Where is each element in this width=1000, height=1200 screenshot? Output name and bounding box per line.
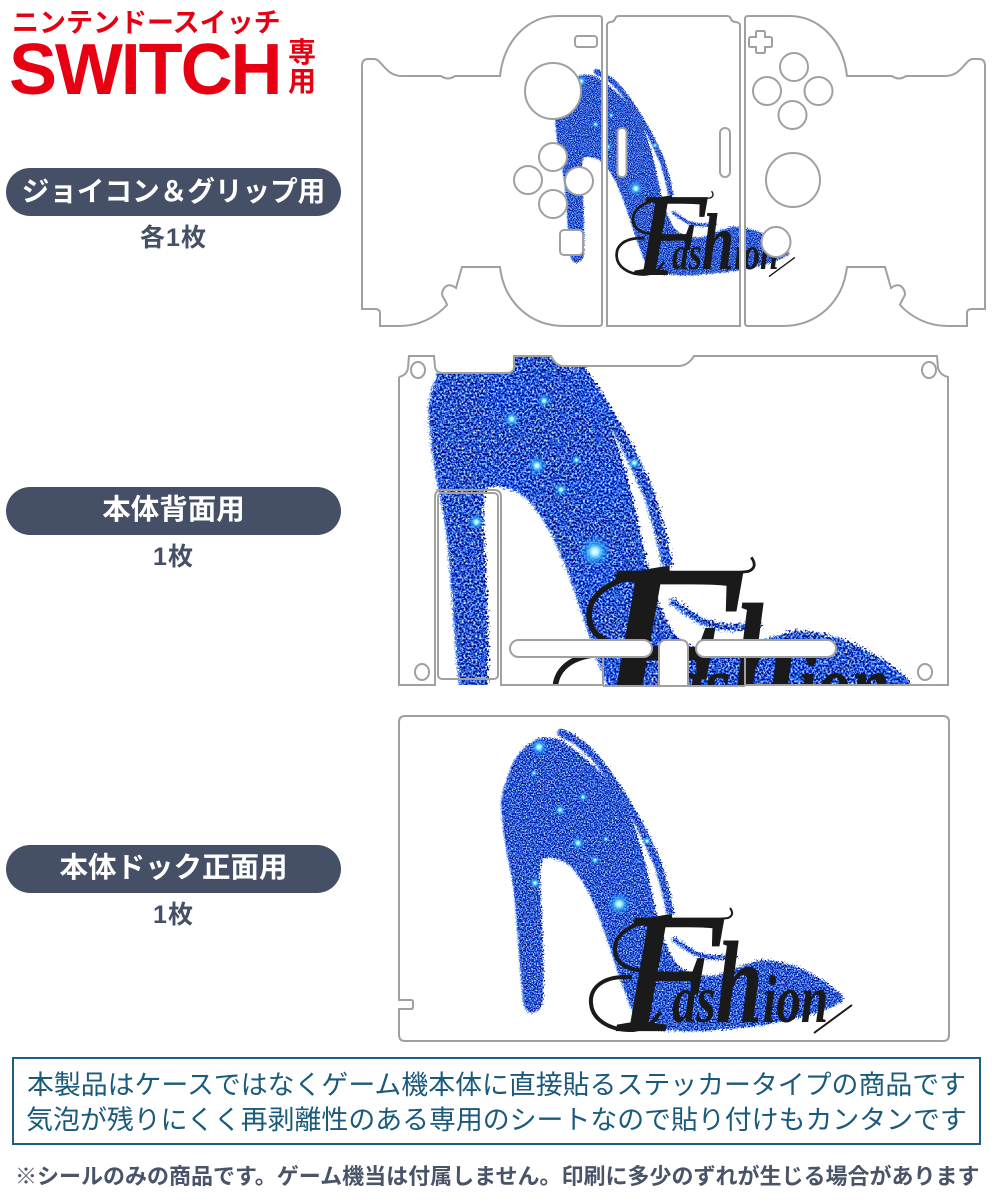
Fashion lettering, small: ashion [672, 198, 779, 287]
panel: console back skin [398, 355, 949, 687]
title exclusive mark: 専用 [288, 37, 316, 97]
kickstand pocket inner outline [438, 493, 498, 679]
shoe artwork on joycons [555, 72, 795, 300]
count: console back: 1枚 [153, 543, 194, 571]
count: joycon and grip: 各1枚 [140, 224, 207, 252]
back cover outline [399, 356, 948, 685]
panel seams [602, 10, 607, 335]
bottom segment lines [603, 658, 745, 686]
title SWITCH wordmark: SWITCH [9, 30, 280, 110]
Fashion lettering, small: F [634, 172, 707, 300]
slot center notch [659, 640, 688, 686]
notice line 2: 気泡が残りにくく再剥離性のある専用のシートなので貼り付けもカンタンです [26, 1105, 967, 1135]
title katakana line: ニンテンドースイッチ [12, 8, 281, 38]
right joycon outline [745, 16, 985, 326]
Fashion lettering, small [617, 172, 795, 300]
count: dock front: 1枚 [153, 901, 194, 929]
dock outline [399, 716, 949, 1041]
Fashion lettering, large: ashion [670, 571, 890, 755]
label: dock front: 本体ドック正面用 [59, 852, 288, 884]
Fashion lettering, large [552, 556, 886, 685]
label: console back [6, 487, 341, 535]
notice box [12, 1057, 981, 1145]
center grip outline [607, 16, 740, 326]
Fashion lettering, full [591, 879, 852, 1067]
label: joycon and grip: ジョイコン＆グリップ用 [22, 176, 325, 207]
title: Nintendo Switch [9, 8, 316, 110]
label: joycon and grip [6, 168, 341, 216]
panel: dock front skin [399, 716, 949, 1067]
slots [510, 640, 652, 657]
notice line 1: 本製品はケースではなくゲーム機本体に直接貼るステッカータイプの商品です [27, 1070, 966, 1100]
panel: joycon and grip skin [362, 10, 985, 335]
label: console back: 本体背面用 [102, 494, 245, 526]
shoe artwork on dock [501, 733, 843, 1032]
label: dock front [6, 845, 341, 893]
joycon cutouts [514, 31, 832, 257]
Fashion lettering, full: ashion [672, 918, 828, 1048]
illustration panels [361, 15, 986, 1042]
left joycon outline [362, 16, 602, 326]
screw holes [411, 362, 936, 680]
shoe artwork on back [424, 357, 912, 685]
footnote: ※シールのみの商品です。ゲーム機当は付属しません。印刷に多少のずれが生じる場合があります [15, 1164, 979, 1189]
Fashion lettering, large: F [591, 515, 742, 781]
